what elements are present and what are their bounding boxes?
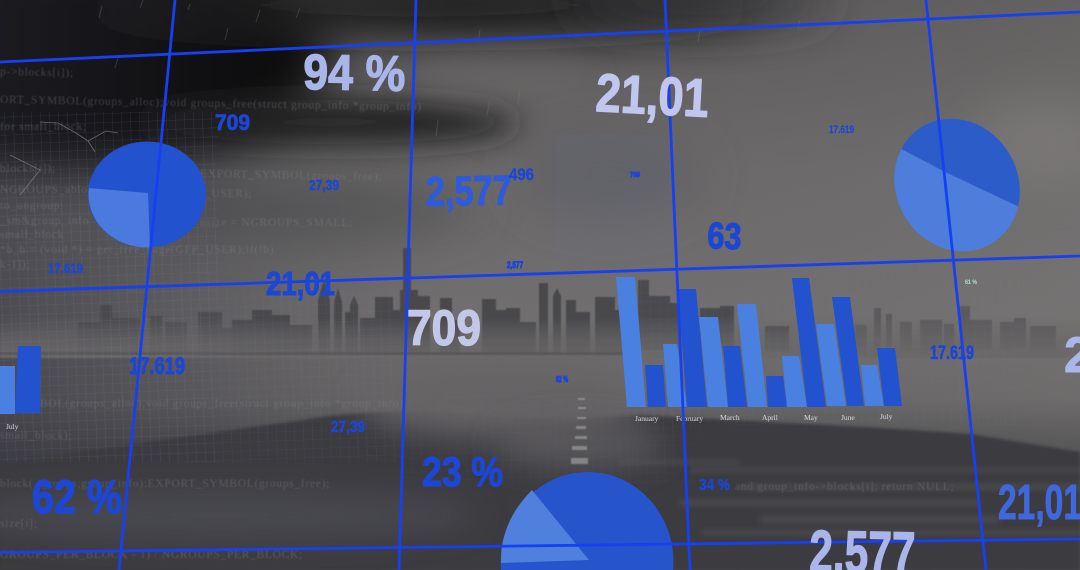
bar chart: left edge bbox=[0, 346, 41, 431]
left pie light slice bbox=[89, 188, 150, 248]
land and water bbox=[0, 412, 1080, 570]
code text overlay: block( )groups;group_info):EXPORT_SYMBOL(groups_free); bbox=[0, 478, 330, 490]
bar chart month labels: March bbox=[720, 413, 740, 422]
code text overlay: _sm&group_info bbox=[0, 215, 89, 227]
figure: 709 small: 709 bbox=[215, 110, 250, 135]
bar chart month labels: June bbox=[841, 413, 855, 422]
code text overlay: _USER); bbox=[204, 188, 252, 200]
figure: 2,577 tiny: 2,577 bbox=[507, 260, 523, 270]
code text overlay: small_block); bbox=[0, 430, 72, 442]
figure: 27,39 lower: 27,39 bbox=[331, 419, 365, 436]
figure: 61 % teal: 61 % bbox=[965, 280, 978, 286]
code text overlay: for small_block; bbox=[0, 121, 87, 133]
figure: 62 % tiny: 62 % bbox=[556, 375, 568, 384]
code text overlay: to_ungroup: bbox=[0, 200, 64, 212]
bar chart month labels: February bbox=[676, 414, 703, 423]
mesh panels bbox=[0, 112, 1020, 485]
code text overlay: nsize = NGROUPS_SMALL; bbox=[200, 217, 353, 229]
figure: 63: 63 bbox=[707, 215, 742, 257]
figure: 23 %: 23 % bbox=[422, 448, 503, 495]
bottom pie light slice bbox=[501, 490, 589, 563]
figure: 94 %: 94 % bbox=[303, 44, 406, 102]
code text overlay: *b_h = (void *) = get_free_page(GFP_USER);if(!b) bbox=[0, 244, 274, 256]
code text overlay: NGROUPS_ablocks* bbox=[0, 184, 112, 196]
bar chart month labels bbox=[635, 412, 893, 423]
figure: 709 large: 709 bbox=[407, 300, 481, 356]
code text overlay: k-1]); bbox=[0, 259, 30, 271]
figure: 17.619 right: 17.619 bbox=[930, 343, 974, 364]
bar chart month labels: July bbox=[880, 412, 893, 421]
centre-line dashes bbox=[571, 398, 588, 464]
pie chart: left bbox=[88, 142, 206, 248]
pie chart: bottom centre bbox=[501, 472, 673, 570]
bar chart month labels: January bbox=[635, 414, 659, 423]
rain streaks bbox=[99, 0, 800, 136]
bar chart month labels: April bbox=[762, 413, 778, 422]
pie chart: top right bbox=[894, 118, 1020, 252]
figure: 34 %: 34 % bbox=[699, 477, 730, 494]
figure: 496: 496 bbox=[509, 165, 534, 184]
code text overlay: BOL(groups_alloc);void groups_free(struct group_info *group_info) bbox=[40, 398, 404, 410]
code text overlay bbox=[0, 66, 954, 561]
code text overlay: GROUPS_PER_BLOCK - 1) / NGROUPS_PER_BLOCK; bbox=[0, 549, 303, 561]
bar chart: centre right bbox=[616, 277, 902, 423]
figure: 17.619 left: 17.619 bbox=[48, 260, 83, 276]
figure: 27,39: 27,39 bbox=[309, 177, 339, 194]
left bar label: July bbox=[6, 422, 19, 431]
lightning bolt bbox=[10, 122, 118, 195]
figure: 21,01 top: 21,01 bbox=[594, 63, 710, 129]
figure: 62 %: 62 % bbox=[32, 470, 122, 523]
figure: 17.619 centre left: 17.619 bbox=[129, 353, 185, 380]
figure: 17.619 top right: 17.619 bbox=[829, 124, 854, 136]
city skyline bbox=[0, 248, 1080, 358]
right pie dark slice bbox=[901, 118, 1020, 206]
code text overlay: ORT_SYMBOL(groups_alloc);void groups_free(struct group_info *group_info) bbox=[0, 94, 422, 113]
bar chart month labels: May bbox=[804, 413, 818, 422]
figure: 709 tiny: 709 bbox=[630, 172, 640, 179]
code text overlay: size[i]; bbox=[0, 518, 38, 530]
figure: 2,577: 2,577 bbox=[425, 167, 512, 215]
code text overlay: EXPORT_SYMBOL(groups_free); bbox=[200, 168, 383, 183]
figure: 21,01 middle: 21,01 bbox=[266, 265, 335, 302]
code text overlay: blocks[i]); bbox=[0, 163, 56, 175]
code text overlay: and group_info->blocks[i]; return NULL; bbox=[735, 481, 954, 493]
code text overlay: p->blocks[i]); bbox=[0, 66, 74, 79]
code text overlay: small_block bbox=[0, 229, 64, 241]
